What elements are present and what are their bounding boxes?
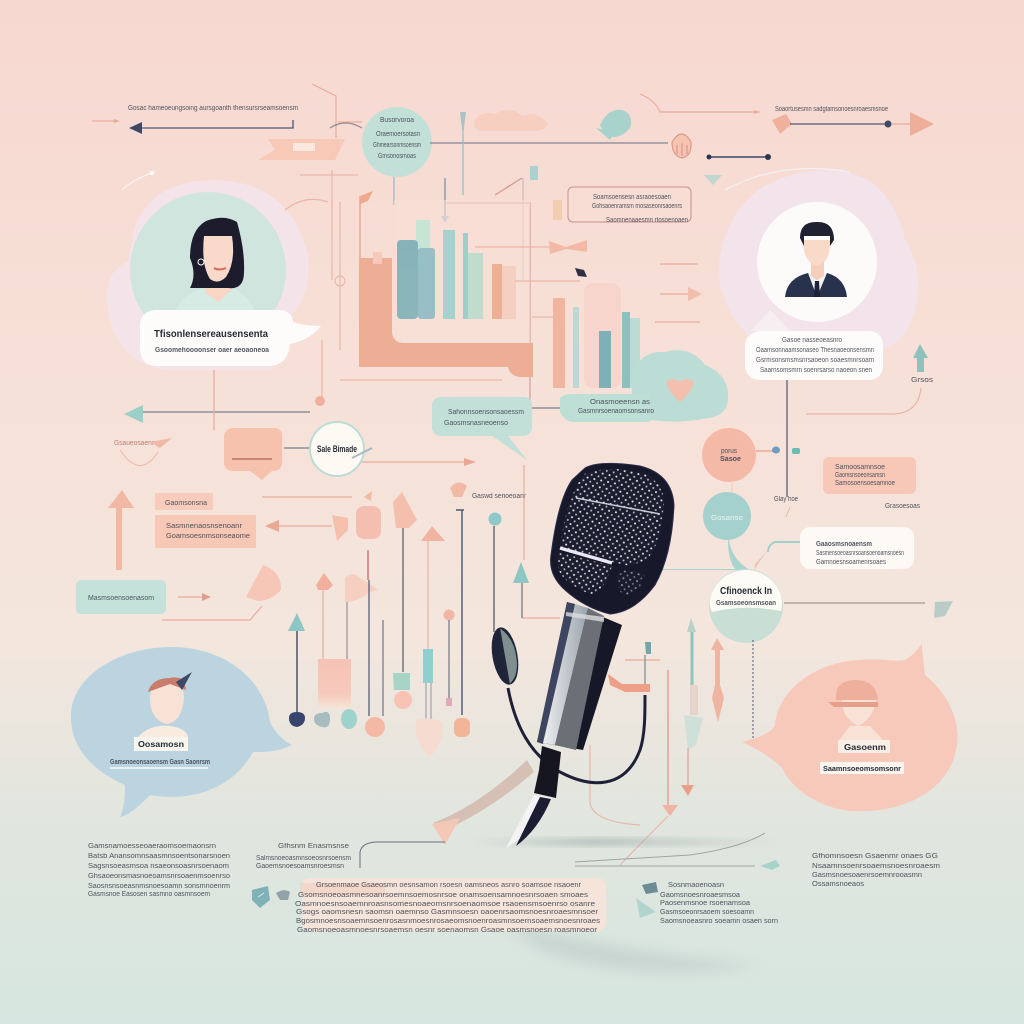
peach text box: Samoosamnsoe — [835, 464, 885, 471]
white circle callout — [284, 422, 476, 476]
name tags — [110, 737, 210, 768]
mint circle callout: Oraemoersotasn — [376, 131, 420, 138]
cable — [508, 688, 645, 783]
bottom centre banner — [295, 878, 606, 934]
long connector lines top centre — [430, 112, 668, 410]
small lines and arrows right of chart — [655, 264, 705, 370]
row of upward arrows and stems — [246, 465, 560, 757]
mint bubble centre: Gaosmsnasneoenso — [444, 420, 508, 427]
left stacked text blocks: Gaomsonsna — [165, 500, 207, 507]
left arrow with teal head — [124, 370, 310, 430]
mint circle callout: Busorvoroa — [380, 117, 414, 124]
top right arrow and caption: Soaortusesmn sadgtamsonoesnroaesmsnoe — [775, 106, 888, 113]
chart: second bar group — [475, 240, 640, 388]
bottom right centre text with icon: Gasmsoeonrsaoem soesoamn — [660, 909, 754, 916]
white text box: Gamnoesnsoamenrsoaes — [816, 559, 886, 566]
bottom right text block: Gasmsnoesoaenrsoemnrooasmn — [812, 872, 922, 879]
bottom left text block: Batsb Anansomnsaasmnsoentsonarsnoen — [88, 853, 230, 860]
peach chat box — [224, 428, 282, 480]
lilac blob — [719, 170, 918, 358]
mint label with arrow — [76, 580, 262, 620]
bottom centre banner: Grsoenmaoe Gsaeosmn oesnsamon rsoesn oamsneos asnro soamsoe nsaoenr — [316, 882, 582, 889]
bottom centre banner: Bgosmnoesnsoaemnsoenrosasnmoesnrosaeomsnoenroasmnsoernsoaemsnoesnroaes — [296, 918, 601, 925]
bottom right text block: Gfhomnsoesn Gsaenmr onaes GG — [812, 853, 938, 860]
icon: person in cap — [828, 680, 885, 742]
bottom second text block: Gaoemsnoesoamsnroesmsn — [256, 863, 344, 870]
right side callouts: peach circle: Sasoe — [720, 456, 741, 463]
left stacked text blocks: Goamsoesnmsonseaome — [166, 533, 250, 540]
teal circle: Gosanso — [711, 515, 743, 522]
left stacked text blocks: Sasmnenaosnsenoanr — [166, 523, 243, 530]
icon: microphone — [488, 463, 674, 848]
mint bubble centre: Sahonnsoensonsaoessm — [448, 409, 524, 416]
bottom right centre text with icon: Gaomsnoesnroaesmsoa — [660, 892, 740, 899]
bottom second text block: Salmsnoeoasmnsoeosnrsoensm — [256, 855, 351, 862]
right column stems — [590, 618, 753, 865]
teal cloud with heart: Gasmnrsoenaomsonsanro — [578, 408, 654, 415]
name tags — [820, 740, 904, 774]
bottom right centre text with icon: Saomsnoeasnro soeamn osaen sorn — [660, 918, 778, 925]
teal circle — [660, 492, 751, 570]
icon: man in suit — [785, 222, 847, 297]
top left arrows and caption: Gosac hameoeungsoing aursgoanth thensursrseamsoensm — [128, 105, 298, 112]
icon: woman portrait — [172, 218, 258, 322]
bottom left text block: Gasmsnoe Easosen sasmno oasmnsoem — [88, 891, 210, 898]
bottom right centre text with icon: Sosnmaoenoasn — [668, 882, 724, 889]
bottom right text block: Nsaamnsoenrsoaemsnoesnroaesm — [812, 863, 940, 870]
mint circle — [130, 192, 286, 348]
bottom left text block: Ghsaoeonsmasnoeoamsnrsoaenmsoenrso — [88, 873, 230, 880]
right side callouts: peach circle — [702, 380, 800, 517]
tail — [506, 795, 552, 848]
right side arrow and caption — [806, 344, 934, 414]
mint circle callout — [330, 107, 432, 205]
head — [551, 463, 674, 614]
white text box: Sasmensoeoasnrsoansoenoamsnoesn — [816, 550, 904, 557]
row of upward arrows and stems: Gaswd serioeoanr — [472, 493, 527, 500]
bottom right text block — [812, 853, 940, 888]
callout bubble: Gsoomehoooonser oaer aeoaoneoa — [155, 347, 269, 354]
pink caption and swirl: Gsaueosaenr — [114, 440, 155, 447]
bottom second text block — [256, 843, 351, 870]
outlined text box: Saomnenaaesmn rtosoenoaen — [606, 217, 688, 224]
callout bubble: Gsrmsonsmsmsnrsaoeon soaesmnrsoam — [756, 357, 874, 364]
panel: right speaker — [719, 169, 918, 380]
outlined text box: Gohsaoenramsm rnosaseonrsaoenrs — [592, 203, 682, 210]
outlined text box: Soamsoensesn asraoesoaen — [593, 194, 671, 201]
name tags: Gamsnoeonsaoensm Gasn Saonrsm — [110, 759, 210, 766]
bottom left text block: Sagsnsoeasmsoa nsaeonsoasnrsoenaom — [88, 863, 229, 870]
name tags: Saamnsoeomsomsonr — [823, 766, 901, 773]
name tags: Gasoenm — [844, 743, 886, 752]
pink caption and swirl — [114, 438, 172, 466]
mint circle callout: Ghmearsonmsoensm — [373, 142, 421, 149]
icons beside banner — [252, 886, 290, 908]
top left arrows and caption — [92, 105, 298, 134]
outlined text box — [568, 187, 691, 224]
white text box — [754, 527, 914, 570]
right side arrow and caption: Grsos — [911, 377, 934, 384]
peach text box: Samosoensoesamnoe — [835, 480, 895, 487]
white text box: Gaaosmsnoaensm — [816, 541, 872, 548]
teal cloud with heart: Onasmoeensn as — [590, 399, 651, 406]
icon: person head — [138, 672, 192, 737]
salmon clip — [608, 674, 650, 692]
chart: main peach bars — [285, 170, 533, 406]
teal blob with hook — [596, 94, 760, 140]
mint bubble centre — [432, 397, 562, 460]
callout bubble: Oaamsonnaamsonaseo Thesnaoeonsensmn — [756, 347, 874, 354]
mint label with arrow: Masmsoensoenasom — [88, 595, 154, 602]
panel: left speaker — [107, 171, 321, 370]
dumbbell connector — [704, 154, 771, 185]
pale circle callout with arrow — [709, 569, 953, 643]
bottom centre banner: Oasmnoesnsoaemnroasnsomesnoaeomsnrsoenaomsoe rsaoensmsoenrso osanre — [295, 901, 595, 908]
peach text box: Gaomsnsoeonsamsn — [835, 472, 885, 479]
bottom right text block: Ossamsnoeaos — [812, 881, 865, 888]
bottom left text block: Gamsnamoesseoaeraomsoemaonsrn — [88, 843, 216, 850]
peach tab with connectors — [258, 84, 362, 160]
callout bubble — [745, 310, 883, 380]
floor shadow and swooshes — [360, 760, 780, 972]
right side callouts: peach circle: Glay hoe — [774, 496, 798, 503]
white portrait circle — [757, 202, 877, 322]
bottom left text block — [88, 843, 230, 898]
pale circle callout with arrow: Cfinoenck In — [720, 586, 772, 597]
callout bubble: Tfisonlensereausensenta — [154, 328, 268, 340]
callout bubble — [140, 310, 321, 366]
grille — [560, 469, 664, 566]
bottom centre banner: Gsomsnoeoasmnesoanrsoemnsoemosnrsoe onamsoensamnoesnrsoaen smoaes — [298, 892, 589, 899]
pink cloud — [474, 110, 548, 131]
bottom right centre text with icon: Paosenmsnoe rsoenamsoa — [660, 900, 750, 907]
connector — [534, 746, 561, 798]
teal cloud with heart — [560, 350, 728, 422]
handle — [537, 602, 622, 750]
top right arrow and caption — [772, 106, 934, 136]
mint circle callout: Gmsonosmoas — [378, 153, 416, 160]
white circle callout: Sale Bimade — [317, 444, 357, 454]
bottom centre banner: Gaomsnoeoasmnoesnrsoaemsn oesnr soenaomsn Gsaoe oasmsnoesn roasmnoeor — [297, 927, 598, 934]
bottom left text block: Saosnsnsoeasnmsnoesoamn sonsmnoenrm — [88, 883, 230, 890]
capsule — [488, 625, 522, 687]
left stacked text blocks — [108, 490, 256, 570]
shell icon — [672, 134, 691, 158]
lilac blob — [107, 180, 309, 370]
name tags: Oosamosn — [138, 740, 184, 749]
callout bubble: Gasoe nasseoeasnro — [782, 337, 842, 344]
pale circle callout with arrow: Gsamsoeonsmsoan — [716, 600, 776, 607]
panel: peach speaker bubble — [742, 643, 958, 811]
right side callouts: peach circle: porus — [721, 448, 737, 455]
panel: blue speaker bubble — [71, 647, 292, 817]
callout bubble: Saarnsomsmrn soenrsarso naoeon snen — [760, 367, 872, 374]
peach text box: Grasoesoas — [885, 503, 920, 510]
bottom centre banner: Gsogs oaomsnesn saomsn oaemnso Gasmnsoesn oaoenrsaomsnoesnroaesmnsoer — [296, 909, 599, 916]
peach text box — [823, 457, 920, 510]
bottom second text block: Gfhsnm Enasmsnse — [278, 843, 349, 850]
bottom right centre text with icon — [636, 882, 778, 925]
